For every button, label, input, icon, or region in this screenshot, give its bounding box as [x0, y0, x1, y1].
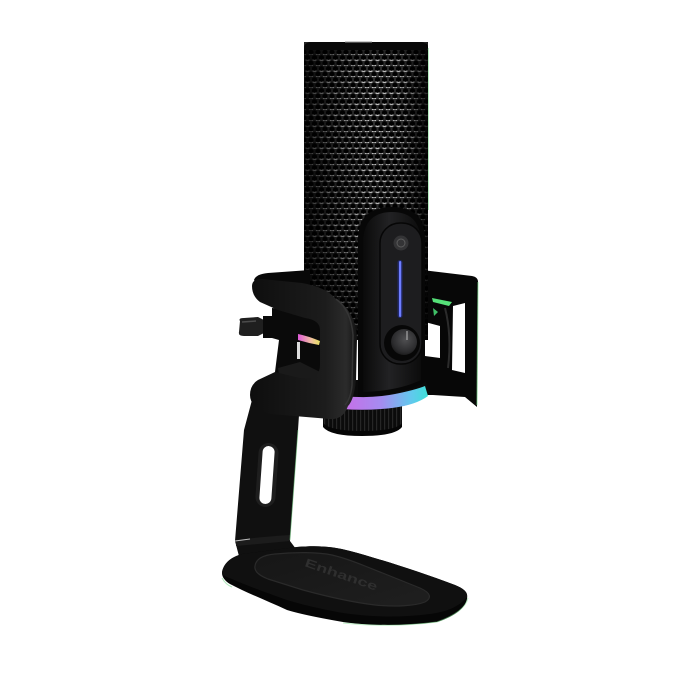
- rear bracket: [422, 270, 478, 407]
- base plate: [222, 546, 468, 625]
- logo badge: [394, 236, 408, 250]
- control strip pill: [380, 223, 422, 364]
- front U clamp: [250, 279, 357, 419]
- slot in arm: [255, 442, 279, 508]
- lower body collar: [323, 402, 402, 436]
- clamp interior: [272, 308, 325, 385]
- microphone body with mesh grille: [304, 42, 428, 340]
- green light leak: [432, 298, 452, 306]
- blue LED indicator: [398, 260, 402, 318]
- control panel: [358, 207, 425, 397]
- RGB light ring: [340, 380, 430, 410]
- stand arm: [235, 400, 300, 566]
- rubber pad with logo: [255, 553, 429, 606]
- thumb screw: [239, 316, 283, 338]
- volume knob: [384, 325, 420, 361]
- clamp RGB light: [298, 334, 320, 345]
- clamp rear band: [254, 270, 310, 295]
- rubber pad with logo: Enhance: [303, 556, 380, 594]
